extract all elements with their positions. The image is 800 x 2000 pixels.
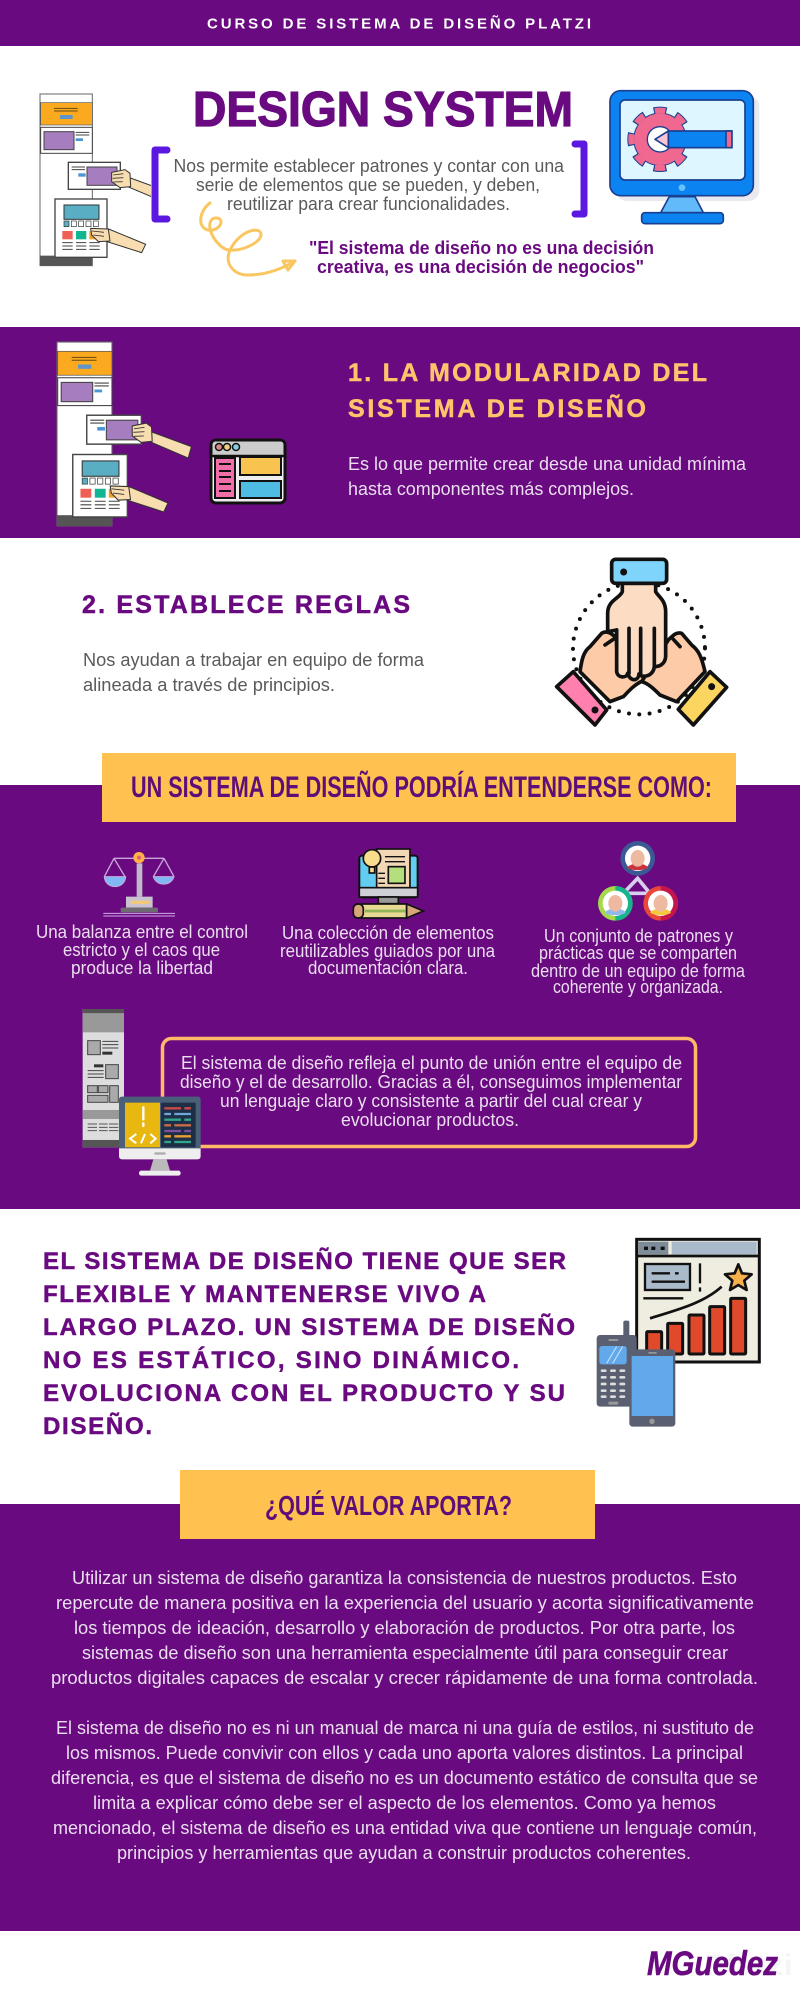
icon: documentation monitor [353, 849, 423, 918]
column text: collection: reutilizables guiados por una [280, 941, 496, 961]
column text: patterns: Un conjunto de patrones y [544, 926, 733, 946]
column text: collection: Una colección de elementos [282, 923, 494, 943]
logo: MGuedez [647, 1945, 778, 1983]
column text: balance [36, 922, 248, 978]
text: rules: Nos ayudan a trabajar en equipo de forma [83, 649, 425, 670]
text: value paragraph 2: diferencia, es que el sistema de diseño no es un documento estático de consulta que se [51, 1768, 758, 1788]
text: value paragraph 2 [51, 1718, 758, 1863]
heading: modularity: 1. LA MODULARIDAD DEL [348, 359, 707, 387]
statement text: FLEXIBLE Y MANTENERSE VIVO A [43, 1281, 486, 1308]
statement text: LARGO PLAZO. UN SISTEMA DE DISEÑO [43, 1313, 575, 1341]
statement text: EVOLUCIONA CON EL PRODUCTO Y SU [43, 1380, 565, 1407]
heading: modularity: SISTEMA DE DISEÑO [348, 393, 646, 423]
banner: value: ¿QUÉ VALOR APORTA? [265, 1490, 512, 1521]
statement text: NO ES ESTÁTICO, SINO DINÁMICO. [43, 1346, 519, 1374]
icon: growth chart and phones [597, 1239, 759, 1427]
text: value paragraph 1 [51, 1568, 758, 1688]
text: modularity [348, 454, 747, 499]
icon: code monitor and layout column [83, 1009, 201, 1176]
statement text [43, 1247, 575, 1440]
column text: patterns [531, 926, 746, 997]
icon: swirl arrow [201, 203, 295, 275]
icon: left bracket [155, 150, 167, 219]
quote [309, 237, 654, 277]
column text: collection [280, 923, 496, 978]
column text: patterns: coherente y organizada. [553, 977, 723, 997]
intro bracket mask [151, 140, 173, 225]
quote: creativa, es una decisión de negocios" [317, 256, 644, 277]
icon: browser window [211, 440, 285, 503]
intro text: Nos permite establecer patrones y contar con una [174, 155, 565, 176]
icon: wireframe with hands (intro) [40, 94, 168, 266]
intro text [174, 155, 565, 214]
text: value paragraph 1: sistemas de diseño son una herramienta especialmente útil para conseguir crear [82, 1643, 728, 1663]
column text: collection: documentación clara. [308, 958, 468, 978]
text: value paragraph 2: los mismos. Puede convivir con ellos y cada uno aporta valores distintos. La principal [66, 1743, 743, 1763]
text: value paragraph 2: El sistema de diseño no es ni un manual de marca ni una guía de estilos, ni sustituto de [56, 1718, 754, 1738]
statement text: EL SISTEMA DE DISEÑO TIENE QUE SER [43, 1247, 566, 1275]
text: value paragraph 2: principios y herramientas que ayudan a construir productos coherentes. [117, 1843, 691, 1863]
text: value paragraph 1: los tiempos de ideación, desarrollo y elaboración de productos. Por otra parte, los [74, 1618, 735, 1638]
intro text: reutilizar para crear funcionalidades. [227, 193, 510, 214]
icon: team network [598, 841, 678, 921]
heading: modularity [348, 359, 707, 423]
text: value paragraph 1: Utilizar un sistema de diseño garantiza la consistencia de nuestros productos. Esto [72, 1568, 737, 1588]
callout box: un lenguaje claro y consistente a partir del cual crear y [220, 1091, 642, 1111]
column text: patterns: dentro de un equipo de forma [531, 961, 746, 981]
column text: patterns: prácticas que se comparten [539, 943, 737, 963]
panel: value band [0, 1504, 800, 1931]
banner: entenderse como [102, 753, 736, 822]
text: rules: alineada a través de principios. [83, 674, 335, 695]
icon: right bracket [575, 144, 584, 214]
callout box: evolucionar productos. [341, 1110, 519, 1130]
callout box [162, 1038, 696, 1146]
text: value paragraph 1: repercute de manera positiva en la experiencia del usuario y acorta significativamente [56, 1593, 754, 1613]
quote: "El sistema de diseño no es una decisión [309, 237, 654, 258]
text: value paragraph 2: mencionado, el sistema de diseño es una entidad viva que contiene un lenguaje común, [53, 1818, 757, 1838]
panel: header band [0, 0, 800, 46]
text: modularity: Es lo que permite crear desde una unidad mínima [348, 454, 747, 474]
text: rules [83, 649, 425, 695]
panel: "entenderse como" band [0, 785, 800, 1209]
header title: CURSO DE SISTEMA DE DISEÑO PLATZI [207, 14, 591, 32]
statement text: DISEÑO. [43, 1412, 152, 1440]
watermark: Platzi [704, 1949, 793, 1982]
callout box: diseño y el de desarrollo. Gracias a él, conseguimos implementar [180, 1072, 682, 1092]
icon: balance scale [103, 852, 175, 916]
column text: balance: Una balanza entre el control [36, 922, 248, 942]
title: DESIGN SYSTEM [193, 83, 573, 137]
text: modularity: hasta componentes más complejos. [348, 479, 634, 499]
intro text: serie de elementos que se pueden, y deben, [196, 174, 540, 195]
banner: value [180, 1470, 595, 1539]
column text: balance: produce la libertad [71, 958, 213, 978]
icon: joined hands [557, 559, 727, 725]
heading: rules: 2. ESTABLECE REGLAS [82, 591, 410, 619]
column text: balance: estricto y el caos que [63, 940, 220, 960]
text: value paragraph 1: productos digitales capaces de escalar y crecer rápidamente de una forma controlada. [51, 1668, 758, 1688]
icon: wireframe with hands (section 1) [57, 342, 191, 526]
text: value paragraph 2: limita a explicar cómo debe ser el aspecto de los elementos. Como ya hemos [93, 1793, 716, 1813]
panel: modularity band [0, 327, 800, 538]
icon: monitor with gear and pencil [610, 91, 759, 224]
callout box: El sistema de diseño refleja el punto de unión entre el equipo de [181, 1053, 682, 1073]
